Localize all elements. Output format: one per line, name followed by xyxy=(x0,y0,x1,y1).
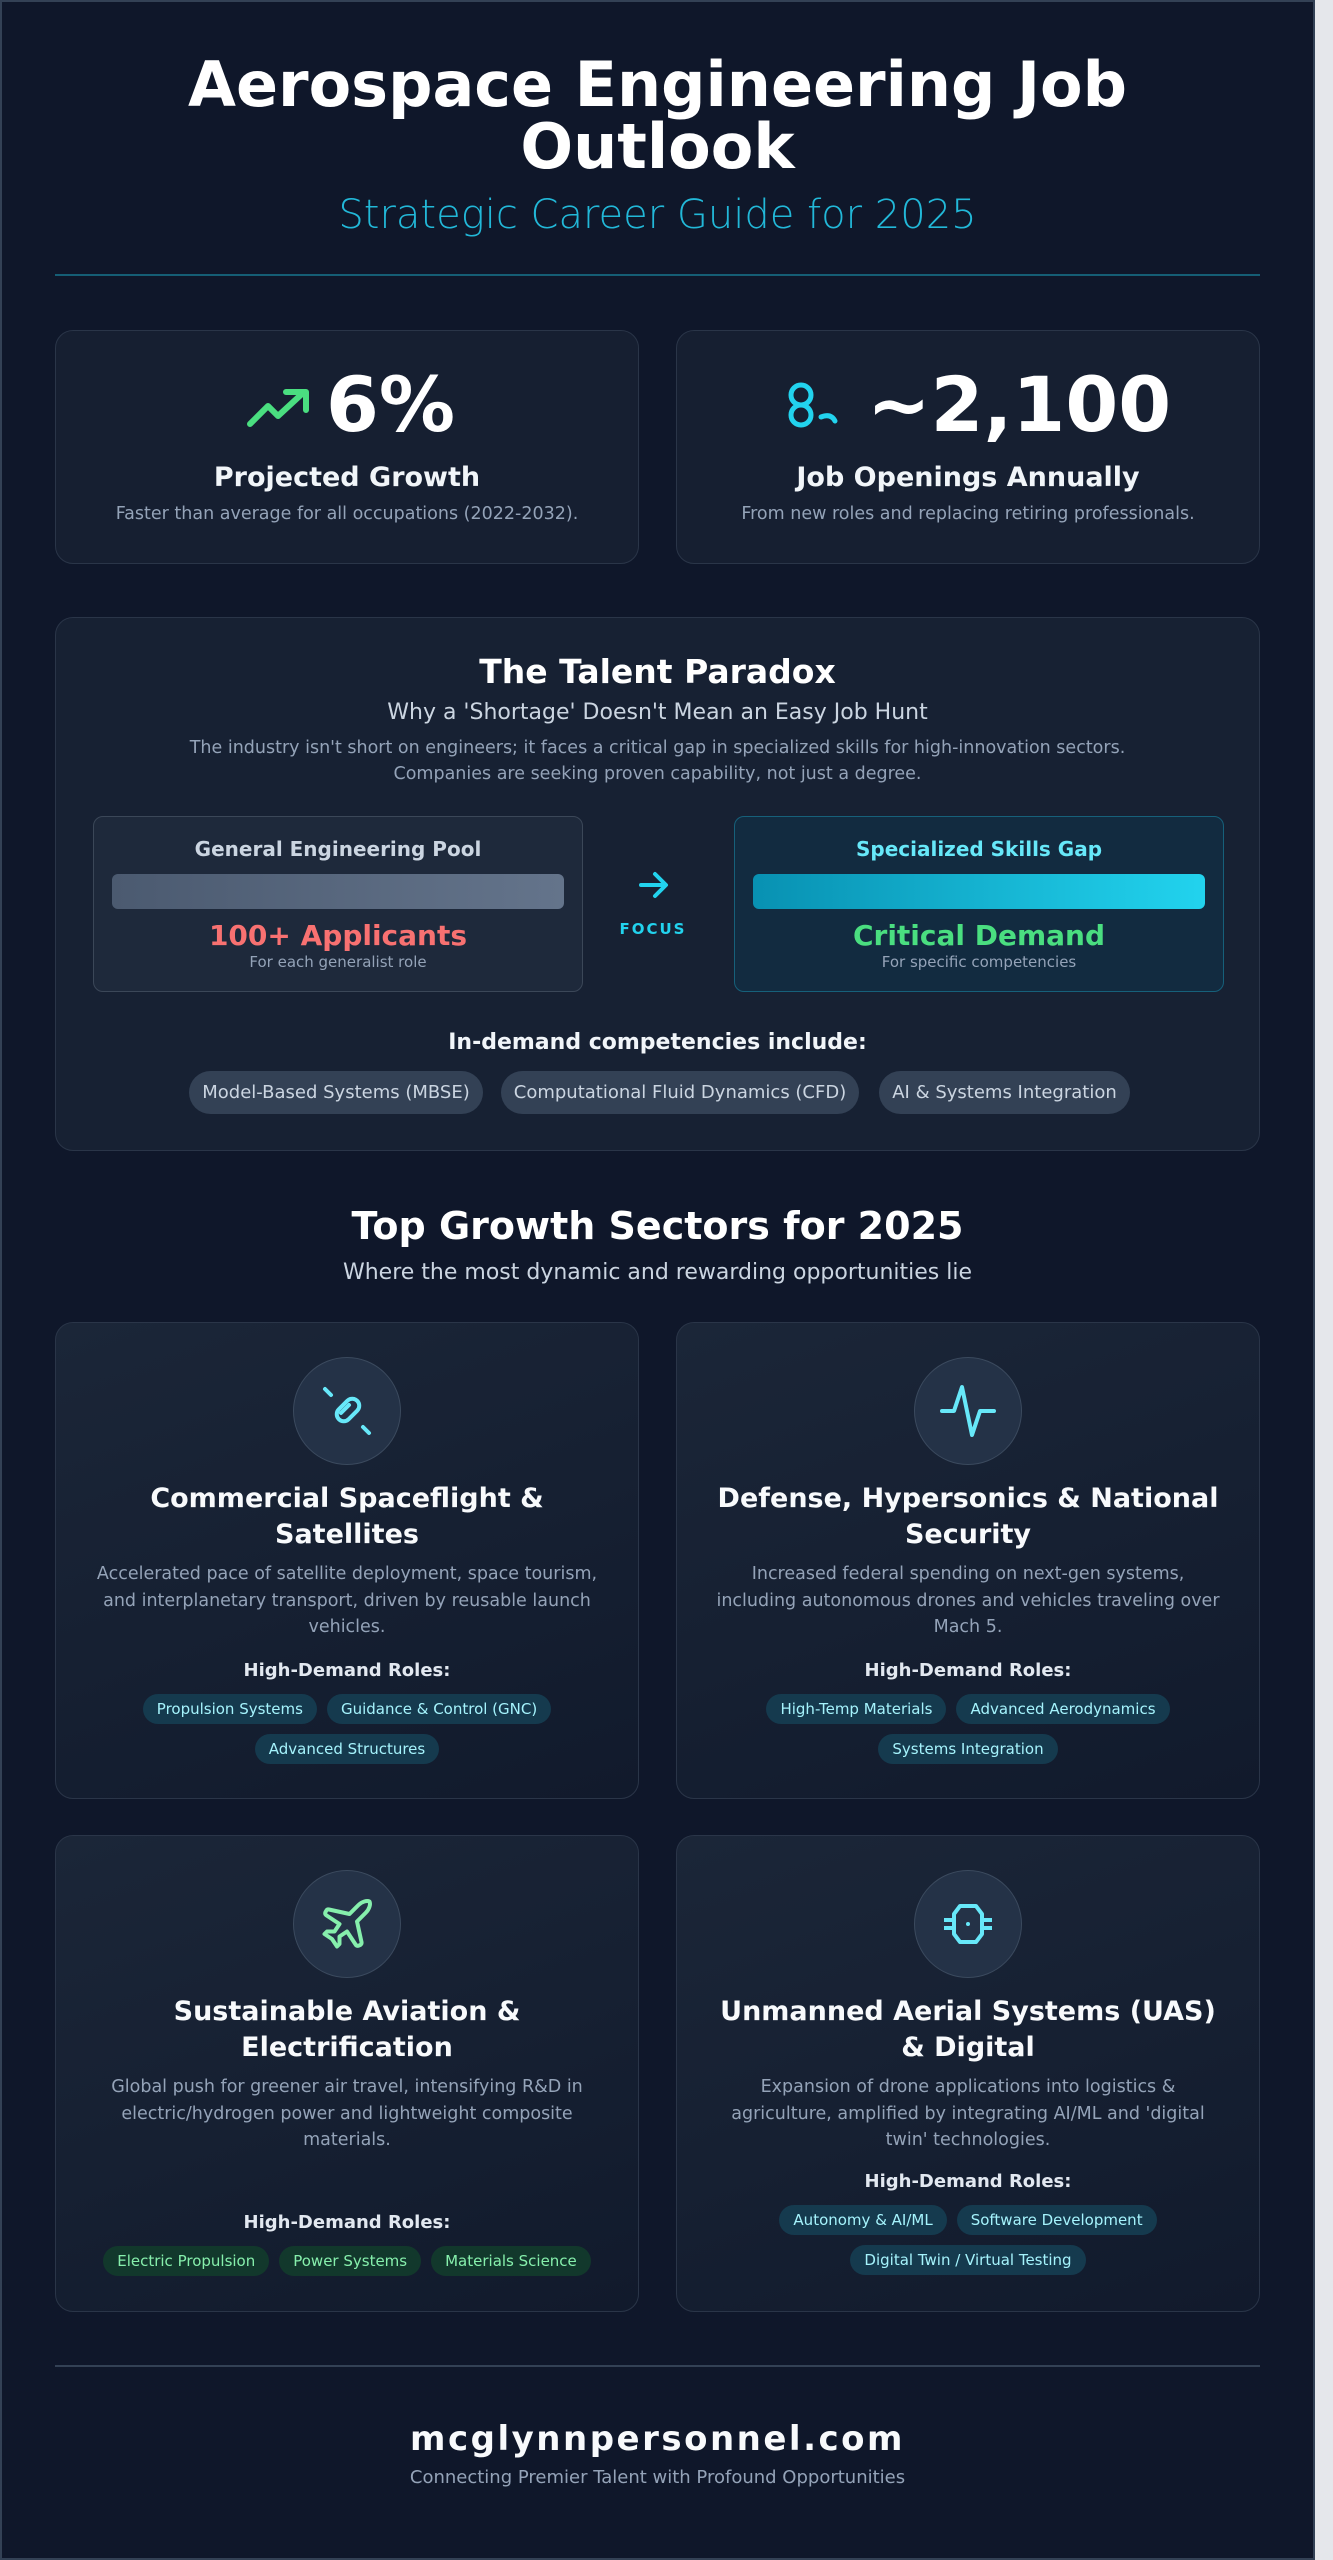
box: general pool: For each generalist role xyxy=(249,953,427,971)
card: commercial spaceflight: Propulsion Systems xyxy=(157,1700,303,1718)
card: commercial spaceflight xyxy=(55,1322,639,1799)
section heading: Top Growth Sectors for 2025 xyxy=(352,1204,963,1248)
card: UAS: Digital Twin / Virtual Testing xyxy=(864,2251,1072,2269)
description: The industry isn't short on engineers; it faces a critical gap in specialized skills for high-innovation sectors. xyxy=(190,738,1125,758)
card: sustainable aviation: Materials Science xyxy=(445,2252,577,2270)
arrow: focus xyxy=(620,872,686,938)
card: defense: High-Temp Materials xyxy=(780,1700,932,1718)
label: Job Openings Annually xyxy=(796,462,1140,493)
icon: trending up xyxy=(247,389,309,427)
title xyxy=(174,1996,520,2063)
description xyxy=(716,1564,1220,1637)
title xyxy=(718,1483,1218,1550)
panel: talent paradox: AI & Systems Integration xyxy=(892,1082,1117,1103)
description xyxy=(97,1564,597,1637)
card: defense: Systems Integration xyxy=(892,1740,1044,1758)
title: Outlook xyxy=(520,110,795,183)
title: Unmanned Aerial Systems (UAS) xyxy=(720,1996,1216,2027)
description: vehicles. xyxy=(308,1617,386,1637)
stat card: growth xyxy=(55,330,639,564)
title: Satellites xyxy=(275,1519,419,1550)
roles: High-Demand Roles: xyxy=(865,1660,1071,1681)
card: commercial spaceflight: Advanced Structures xyxy=(269,1740,425,1758)
box: skills gap: For specific competencies xyxy=(882,953,1076,971)
title: Defense, Hypersonics & National xyxy=(718,1483,1218,1514)
box: skills gap xyxy=(734,816,1224,992)
description: including autonomous drones and vehicles traveling over xyxy=(716,1590,1220,1610)
label: Projected Growth xyxy=(214,462,480,493)
pills xyxy=(189,1071,483,1114)
pills: Model-Based Systems (MBSE) xyxy=(202,1082,470,1103)
section subtitle: Where the most dynamic and rewarding opportunities lie xyxy=(343,1260,972,1285)
card: defense xyxy=(676,1322,1260,1799)
description xyxy=(731,2077,1205,2150)
description: Faster than average for all occupations (2022-2032). xyxy=(116,504,578,524)
title xyxy=(720,1996,1216,2063)
title xyxy=(188,48,1127,183)
card: defense: Advanced Aerodynamics xyxy=(970,1700,1156,1718)
number ~2,100: ~2,100 xyxy=(867,360,1171,449)
description xyxy=(111,2077,583,2150)
description: From new roles and replacing retiring professionals. xyxy=(741,504,1195,524)
panel: talent paradox xyxy=(55,617,1260,1151)
number 6%: 6% xyxy=(326,360,455,449)
title: Sustainable Aviation & xyxy=(174,1996,520,2027)
description: agriculture, amplified by integrating AI/ML and 'digital xyxy=(731,2104,1205,2124)
description: Expansion of drone applications into logistics & xyxy=(761,2077,1175,2097)
title: & Digital xyxy=(901,2032,1035,2063)
box: skills gap: Critical Demand xyxy=(853,919,1105,952)
subtitle: Strategic Career Guide for 2025 xyxy=(338,192,977,238)
footer: tagline: Connecting Premier Talent with Profound Opportunities xyxy=(410,2467,905,2488)
box: general pool: General Engineering Pool xyxy=(195,837,481,861)
box: skills gap: Specialized Skills Gap xyxy=(856,837,1102,861)
icon: pulse xyxy=(914,1357,1022,1465)
roles: High-Demand Roles: xyxy=(244,1660,450,1681)
description: electric/hydrogen power and lightweight composite xyxy=(121,2104,573,2124)
card: UAS: Software Development xyxy=(971,2211,1143,2229)
title: Aerospace Engineering Job xyxy=(188,48,1127,121)
title: Commercial Spaceflight & xyxy=(150,1483,544,1514)
icon: link xyxy=(788,382,838,428)
title: Security xyxy=(905,1519,1031,1550)
footer: website: mcglynnpersonnel.com xyxy=(410,2419,905,2459)
heading: The Talent Paradox xyxy=(479,652,836,691)
subheading: Why a 'Shortage' Doesn't Mean an Easy Job Hunt xyxy=(387,700,928,725)
description: and interplanetary transport, driven by reusable launch xyxy=(103,1590,591,1610)
stat card: openings xyxy=(676,330,1260,564)
roles: High-Demand Roles: xyxy=(244,2212,450,2233)
box: general pool xyxy=(93,816,583,992)
description: materials. xyxy=(303,2130,391,2150)
card: sustainable aviation xyxy=(55,1835,639,2312)
description: Mach 5. xyxy=(934,1617,1002,1637)
competencies heading: In-demand competencies include: xyxy=(448,1030,867,1055)
description xyxy=(190,738,1125,784)
arrow: focus: FOCUS xyxy=(620,920,686,938)
icon: chip xyxy=(914,1870,1022,1978)
icon: rocket xyxy=(293,1357,401,1465)
description: Accelerated pace of satellite deployment, space tourism, xyxy=(97,1564,597,1584)
panel: talent paradox: Computational Fluid Dynamics (CFD) xyxy=(514,1082,846,1103)
description: twin' technologies. xyxy=(886,2130,1050,2150)
description: Global push for greener air travel, intensifying R&D in xyxy=(111,2077,583,2097)
title xyxy=(150,1483,544,1550)
card: commercial spaceflight: Guidance & Control (GNC) xyxy=(341,1700,537,1718)
card: UAS: Autonomy & AI/ML xyxy=(793,2211,933,2229)
icon: plane xyxy=(293,1870,401,1978)
description: Increased federal spending on next-gen systems, xyxy=(752,1564,1184,1584)
card: sustainable aviation: Power Systems xyxy=(293,2252,407,2270)
card: sustainable aviation: Electric Propulsion xyxy=(117,2252,255,2270)
roles: High-Demand Roles: xyxy=(865,2171,1071,2192)
description: Companies are seeking proven capability, not just a degree. xyxy=(394,764,922,784)
title: Electrification xyxy=(241,2032,453,2063)
card: UAS xyxy=(676,1835,1260,2312)
box: general pool: 100+ Applicants xyxy=(209,919,467,952)
